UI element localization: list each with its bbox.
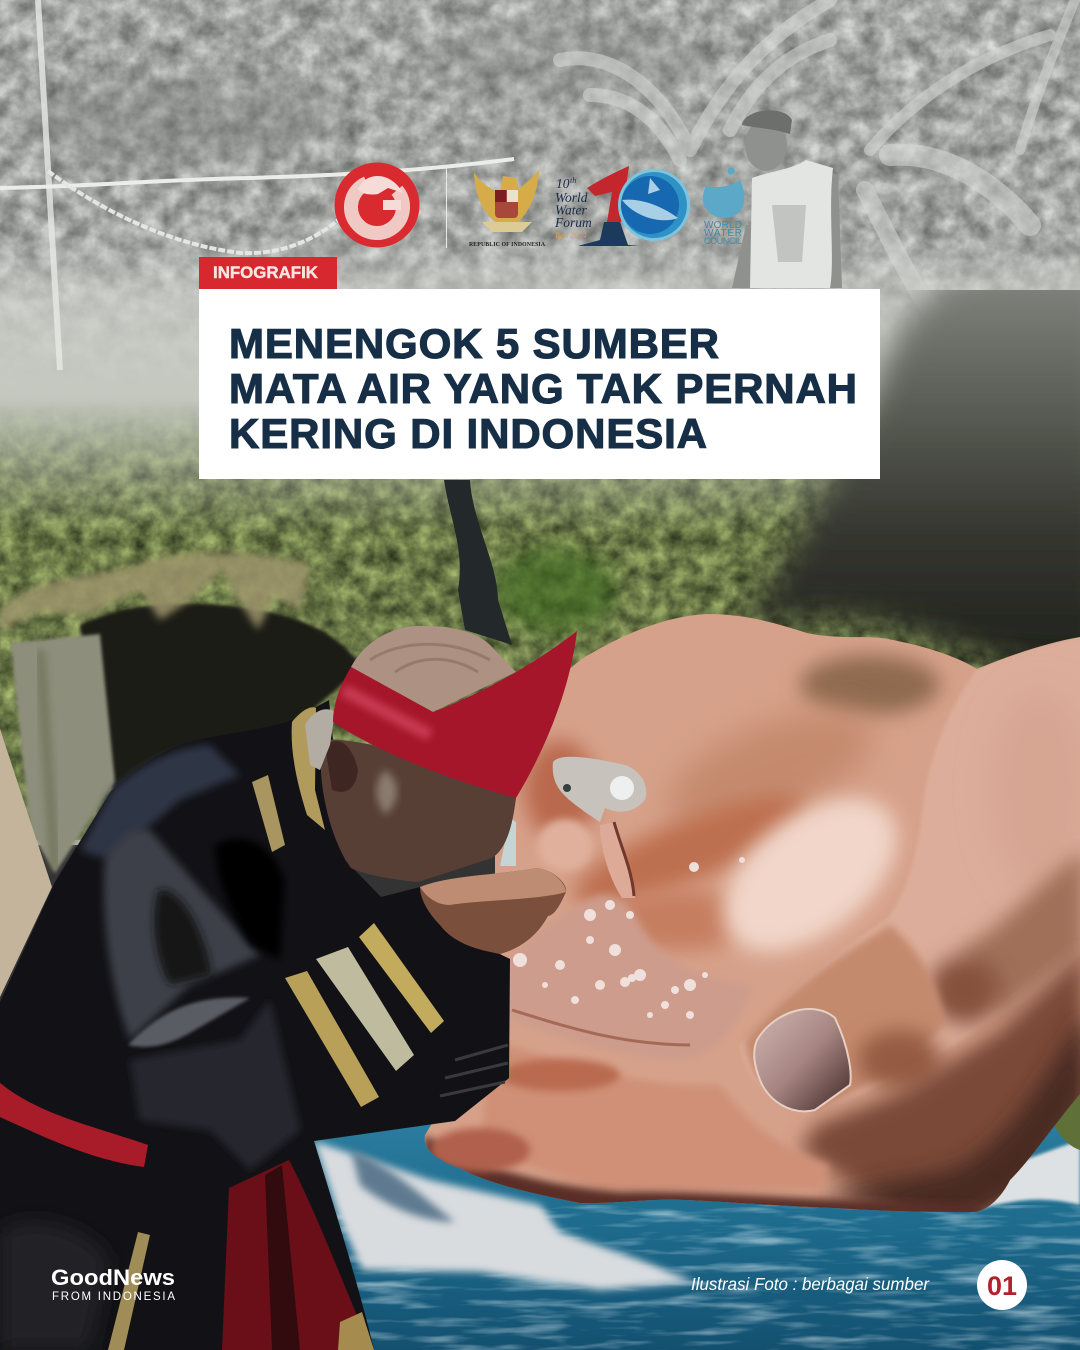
bald head xyxy=(351,626,516,712)
title: MATA AIR YANG TAK PERNAH xyxy=(229,365,857,412)
moss cliff xyxy=(0,400,1080,840)
thumb hairy shading xyxy=(960,850,1080,1015)
water splash in palm xyxy=(500,757,752,1060)
logo: 10th world water forum: Forum xyxy=(554,215,592,230)
mist base below xyxy=(0,455,1080,845)
logo: world water council: WATER xyxy=(704,228,742,239)
foam xyxy=(314,1141,695,1290)
logo: world water council xyxy=(703,168,744,246)
lower dark side xyxy=(800,950,1080,1225)
water stream xyxy=(600,822,635,898)
collar xyxy=(292,707,325,830)
water xyxy=(300,1085,1080,1350)
background: cave and rocks xyxy=(0,480,512,997)
dark chest xyxy=(215,838,285,960)
grey forest xyxy=(0,0,1080,460)
right foam and moss xyxy=(970,1140,1080,1212)
logo: 10th world water forum xyxy=(554,166,690,246)
logo: garuda xyxy=(469,170,546,248)
water droplet xyxy=(553,757,646,822)
pole and wires xyxy=(38,0,60,370)
sleeve cuff lines xyxy=(440,1045,508,1096)
gold stripe on skirt xyxy=(108,1232,150,1350)
jacket sheen: shoulder xyxy=(80,745,240,860)
logo: 10th world water forum: th xyxy=(570,176,576,185)
logo: garuda: REPUBLIC OF INDONESIA xyxy=(469,242,546,248)
title panel xyxy=(199,289,880,479)
divider xyxy=(446,168,447,248)
bottom shadow xyxy=(424,1132,982,1212)
jacket sheen: large fold xyxy=(104,829,260,1040)
tag: infografik xyxy=(199,257,337,289)
brand: goodnews from indonesia xyxy=(51,1265,175,1303)
logo: red circle G xyxy=(334,162,420,248)
brand: goodnews from indonesia: GoodNews xyxy=(51,1265,175,1290)
logos row xyxy=(334,162,744,248)
palm highlight xyxy=(710,788,906,962)
title: MENENGOK 5 SUMBER xyxy=(229,320,719,367)
photo credit: Ilustrasi Foto : berbagai sumber xyxy=(691,1274,930,1294)
logo: 10th world water forum: 10 xyxy=(556,176,570,191)
background: person in white shirt xyxy=(732,110,842,288)
red headband xyxy=(333,631,577,798)
neck and face xyxy=(321,740,516,882)
logo: 10th world water forum: Water xyxy=(555,202,587,218)
background: misty forest and moss xyxy=(0,0,1080,845)
ear xyxy=(325,741,358,792)
small stream by mouth xyxy=(500,818,516,866)
stalactites xyxy=(0,553,310,630)
palm fronds and banana leaves xyxy=(560,0,1075,310)
grey hair xyxy=(305,709,335,770)
stone pillar xyxy=(11,634,115,873)
valley shading xyxy=(800,655,940,715)
logo: world water council: WORLD xyxy=(704,220,742,231)
thumb xyxy=(740,637,1080,1115)
page number xyxy=(977,1260,1027,1310)
title: KERING DI INDONESIA xyxy=(229,410,707,457)
tag: infografik: INFOGRAFIK xyxy=(213,263,319,282)
rice field mist xyxy=(0,235,1080,460)
logo: world water council: COUNCIL xyxy=(704,236,742,246)
red cloth xyxy=(222,1160,372,1350)
dark vine xyxy=(444,480,512,645)
palm base xyxy=(420,600,1080,1220)
page number: 01 xyxy=(987,1271,1017,1301)
man drinking xyxy=(0,626,577,1350)
shoulder stripe xyxy=(252,775,285,852)
thumb tip xyxy=(745,925,945,1112)
jacket body xyxy=(0,700,510,1350)
lower palm xyxy=(480,1040,830,1190)
wooden plank xyxy=(0,729,52,997)
sleeve stripes xyxy=(285,971,379,1107)
cupped hands xyxy=(420,868,566,954)
logo: 10th world water forum: World xyxy=(555,190,588,205)
cave opening xyxy=(80,603,362,790)
background: dark hand shadow top right xyxy=(740,260,1080,680)
jacket sheen: lower folds xyxy=(130,1000,300,1170)
thumbnail xyxy=(754,1009,851,1111)
title xyxy=(229,320,857,457)
red sash xyxy=(0,1083,148,1167)
logo: 10th world water forum: Bali 2024 xyxy=(555,231,586,240)
brand: goodnews from indonesia: FROM INDONESIA xyxy=(52,1291,175,1303)
cupped hand xyxy=(420,600,1080,1225)
